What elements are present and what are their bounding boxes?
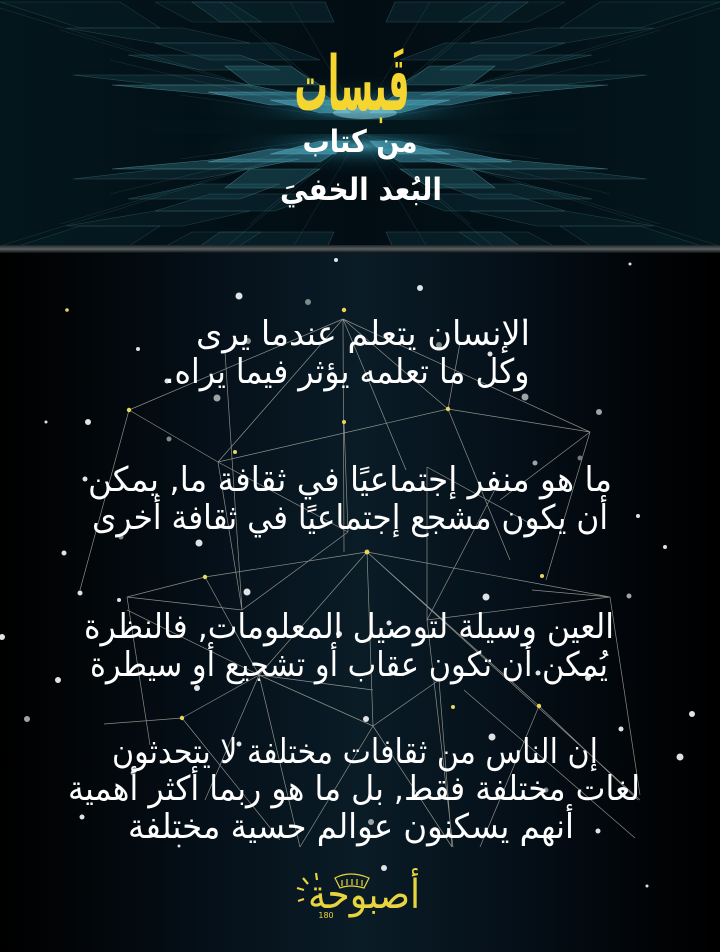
icon: sun rays <box>297 873 317 901</box>
text block: quote 2: أن يكون مشجع إجتماعيًا في ثقافة أخرى <box>92 495 608 538</box>
divider bar <box>0 245 720 253</box>
header panel: perspective grid background <box>0 0 720 252</box>
text block: quote 2: ما هو منفر إجتماعيًا في ثقافة ما, يمكن <box>88 460 612 500</box>
text block: quote 3: يُمكن أن تكون عقاب أو تشجيع أو سيطرة <box>90 642 609 685</box>
subtitle: from the book: من كتاب <box>302 124 418 160</box>
text block: quote 4: إن الناس من ثقافات مختلفة لا يتحدثون <box>112 732 598 772</box>
constellation network <box>80 319 640 847</box>
text block: quote 4: لغات مختلفة فقط, بل ما هو ربما أكثر أهمية <box>68 766 640 809</box>
subtitle: book name: البُعد الخفيَ <box>280 172 442 208</box>
text block: quote 2 <box>88 460 612 538</box>
text block: quote 3 <box>84 607 614 685</box>
yellow star nodes <box>65 308 544 720</box>
text: قَبسات <box>294 39 410 128</box>
star dots <box>0 258 695 888</box>
text block: quote 1: الإنسان يتعلم عندما يرى <box>196 314 530 354</box>
text block: quote 1: وكل ما تعلمه يؤثر فيما يراه. <box>164 352 530 392</box>
logo number: 180 <box>318 911 334 920</box>
text block: quote 4 <box>68 732 640 847</box>
logo: Osbouha 180 <box>297 868 420 920</box>
icon: arch <box>335 874 369 888</box>
text block: quote 1 <box>164 314 530 392</box>
text block: quote 4: أنهم يسكنون عوالم حسية مختلفة <box>128 804 574 847</box>
logo wordmark: أصبوحة <box>308 868 420 918</box>
text block: quote 3: العين وسيلة لتوصيل المعلومات, فالنظرة <box>84 607 614 647</box>
